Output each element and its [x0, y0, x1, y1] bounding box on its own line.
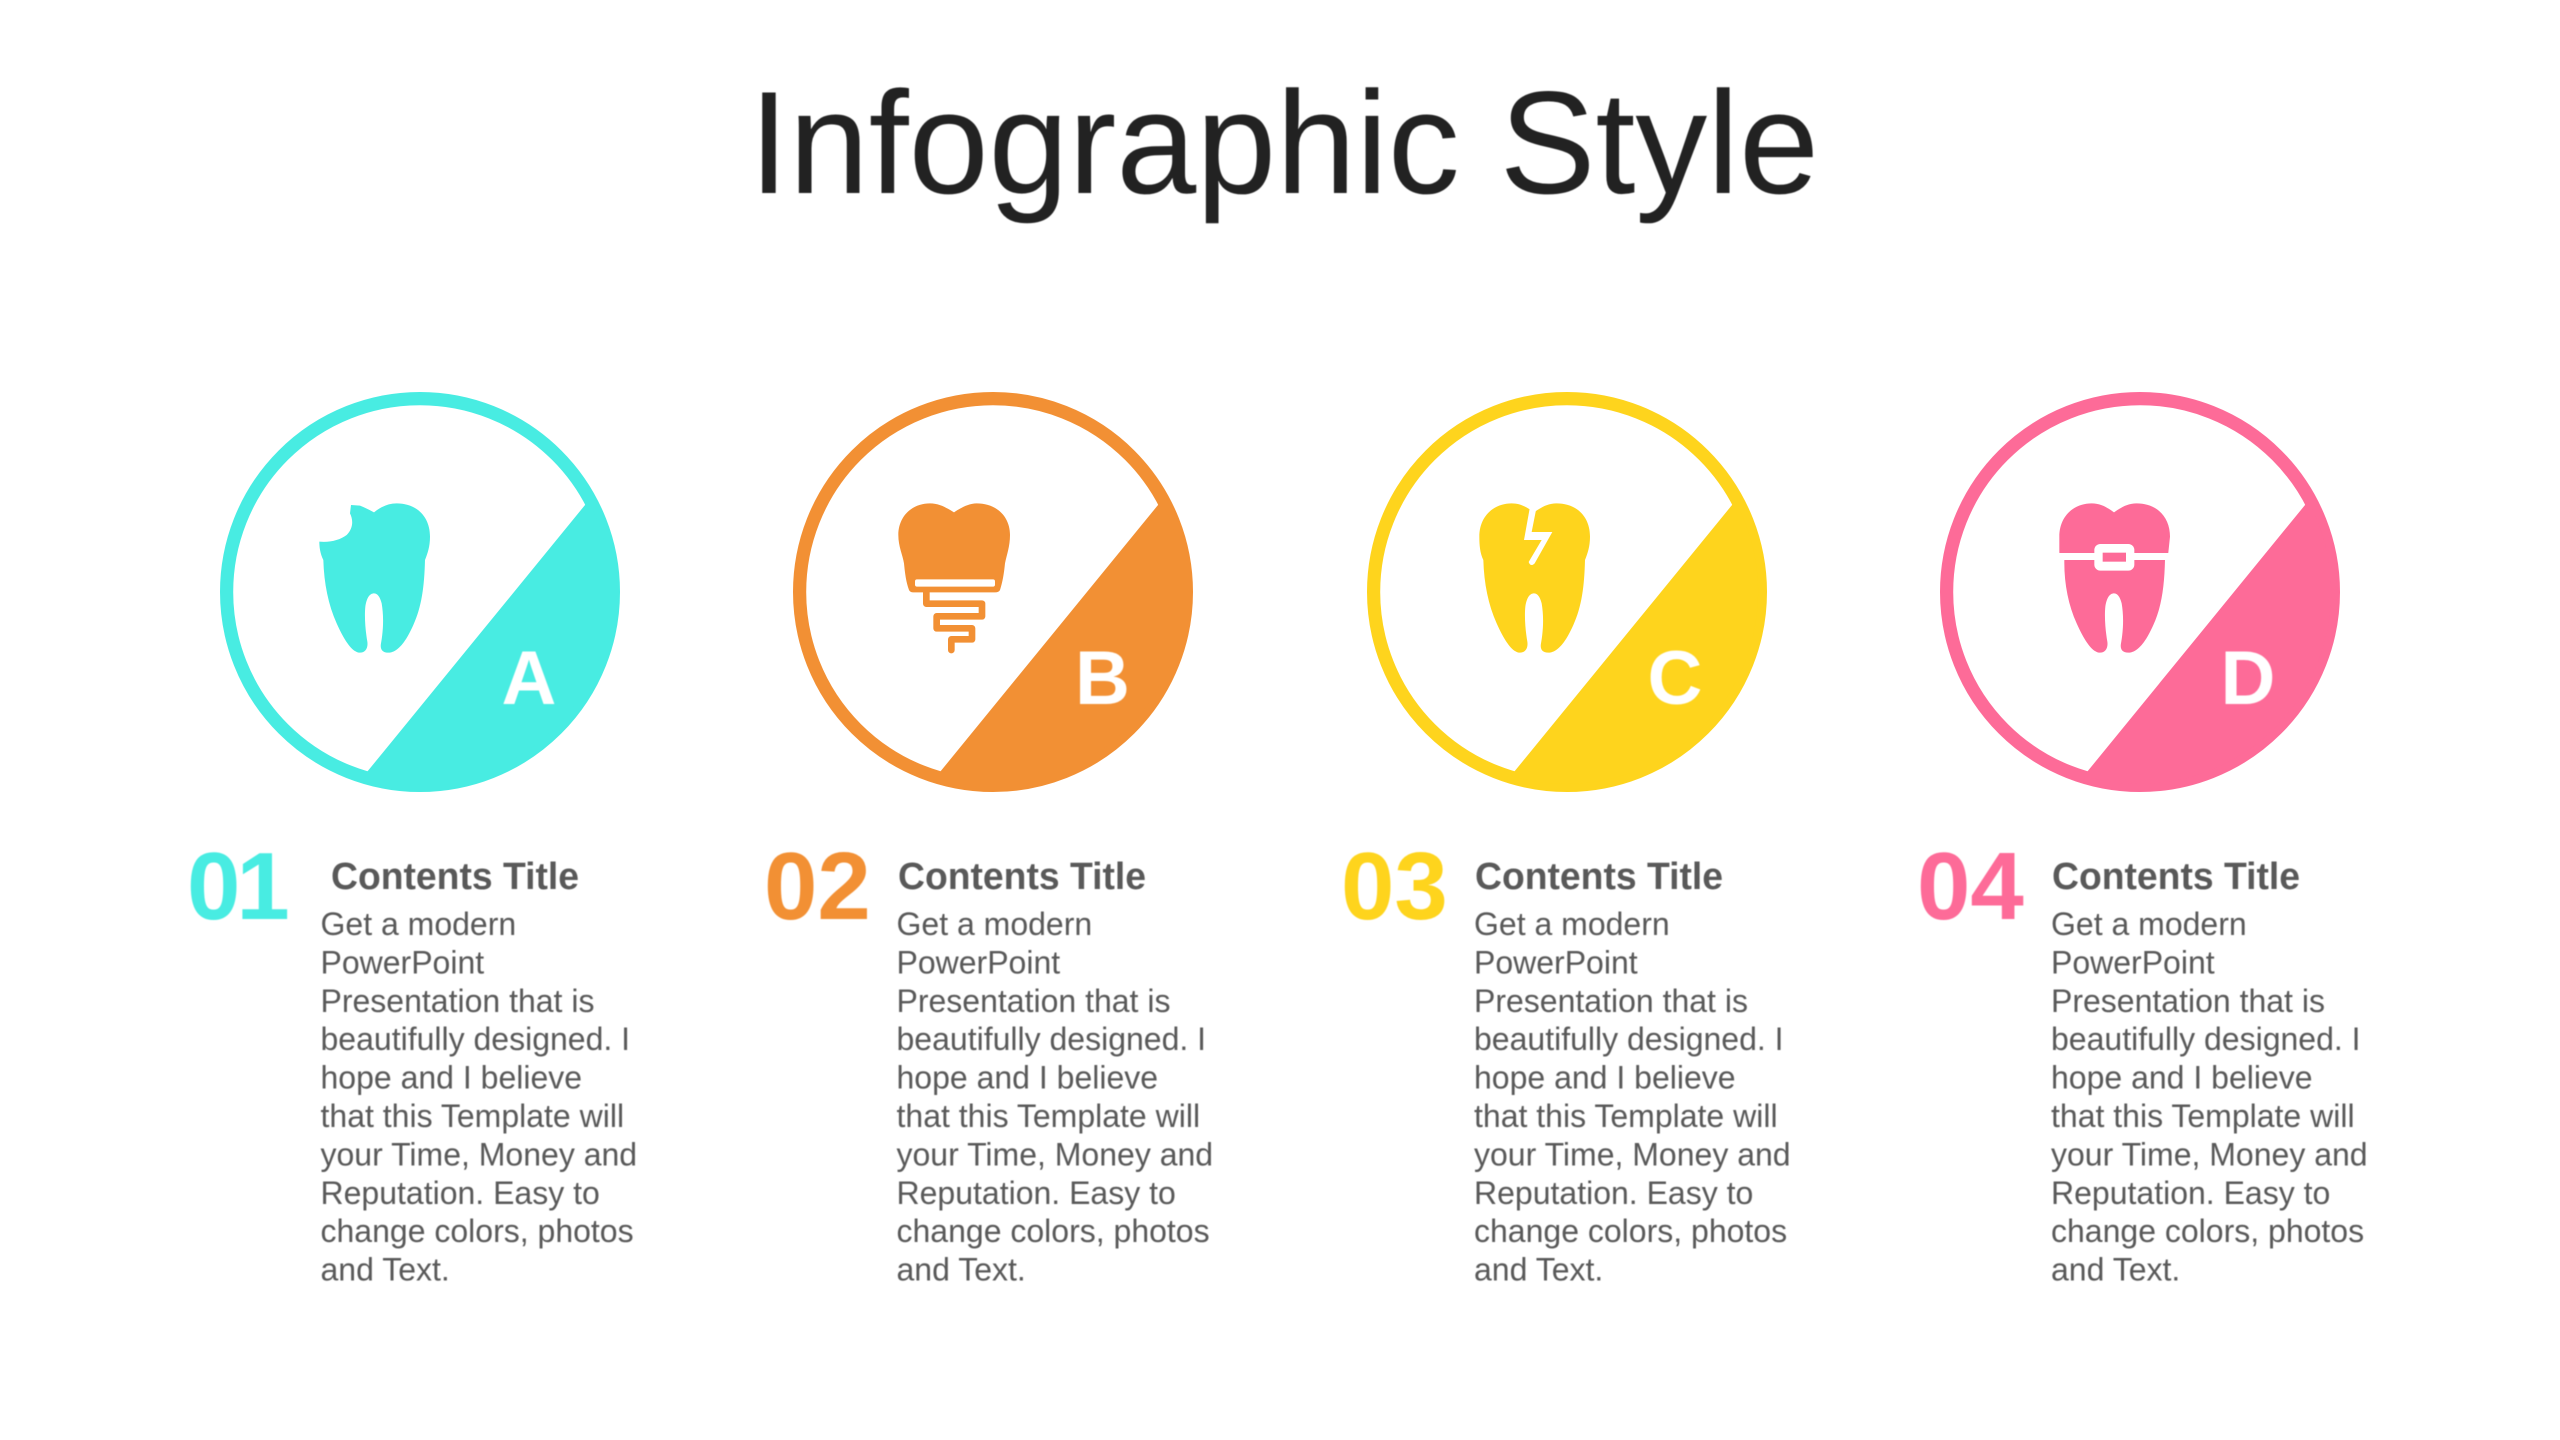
circle badge A [227, 399, 613, 785]
body text 1: beautifully designed. I [320, 1021, 630, 1057]
letter C: C [1648, 636, 1702, 721]
body text 4: hope and I believe [2051, 1060, 2313, 1096]
body text 2: beautifully designed. I [896, 1021, 1206, 1057]
body text 2: Reputation. Easy to [896, 1175, 1176, 1211]
number 03: 03 [1341, 833, 1448, 940]
icon: dental implant [898, 503, 1010, 650]
body text 4: that this Template will [2051, 1098, 2355, 1134]
body text 1: hope and I believe [320, 1060, 582, 1096]
heading 2: Contents Title [898, 856, 1146, 898]
body text 1: that this Template will [320, 1098, 624, 1134]
body text 3: change colors, photos [1474, 1213, 1787, 1249]
heading 1: Contents Title [331, 856, 579, 898]
body text 4: change colors, photos [2051, 1213, 2364, 1249]
icon: tooth with braces [2055, 503, 2175, 653]
icon: cracked tooth [1479, 503, 1590, 653]
heading 4: Contents Title [2052, 856, 2300, 898]
circle badge C [1374, 399, 1760, 785]
body text 3: Presentation that is [1474, 983, 1748, 1019]
body text 3: beautifully designed. I [1474, 1021, 1784, 1057]
title: Infographic Style [749, 61, 1819, 224]
panel: A [187, 399, 646, 1288]
body text 3: hope and I believe [1474, 1060, 1736, 1096]
body text 1: Presentation that is [320, 983, 594, 1019]
panel: D [1917, 399, 2376, 1288]
body text 3: your Time, Money and [1474, 1136, 1791, 1172]
letter D: D [2221, 636, 2275, 721]
number 01: 01 [187, 833, 287, 940]
body text 4: PowerPoint [2051, 944, 2215, 980]
body text 2: PowerPoint [896, 944, 1060, 980]
body text 4: beautifully designed. I [2051, 1021, 2361, 1057]
body text 1: Reputation. Easy to [320, 1175, 600, 1211]
body text 3: that this Template will [1474, 1098, 1778, 1134]
icon: chipped tooth [319, 503, 430, 653]
body text 2: Get a modern [896, 906, 1092, 942]
circle badge B [800, 399, 1186, 785]
heading 3: Contents Title [1475, 856, 1723, 898]
letter A: A [502, 636, 556, 721]
body text 3: Reputation. Easy to [1474, 1175, 1753, 1211]
body text 3: PowerPoint [1474, 944, 1638, 980]
letter B: B [1075, 636, 1130, 721]
body text 2: hope and I believe [896, 1060, 1158, 1096]
body text 4: your Time, Money and [2051, 1136, 2368, 1172]
number 04: 04 [1917, 833, 2024, 940]
body text 1: and Text. [320, 1252, 450, 1288]
number 02: 02 [764, 833, 871, 940]
body text 3: and Text. [1474, 1252, 1603, 1288]
body text 2: that this Template will [896, 1098, 1200, 1134]
circle badge D [1947, 399, 2333, 785]
body text 4: Presentation that is [2051, 983, 2325, 1019]
panel: C [1341, 399, 1799, 1288]
body text 1: PowerPoint [320, 944, 484, 980]
body text 2: your Time, Money and [896, 1136, 1213, 1172]
panel: B [764, 399, 1222, 1288]
body text 4: Reputation. Easy to [2051, 1175, 2330, 1211]
body text 3: Get a modern [1474, 906, 1670, 942]
body text 2: Presentation that is [896, 983, 1170, 1019]
body text 4: and Text. [2051, 1252, 2180, 1288]
body text 2: and Text. [896, 1252, 1026, 1288]
body text 1: Get a modern [320, 906, 516, 942]
body text 1: your Time, Money and [320, 1136, 637, 1172]
body text 1: change colors, photos [320, 1213, 634, 1249]
body text 2: change colors, photos [896, 1213, 1210, 1249]
body text 4: Get a modern [2051, 906, 2247, 942]
